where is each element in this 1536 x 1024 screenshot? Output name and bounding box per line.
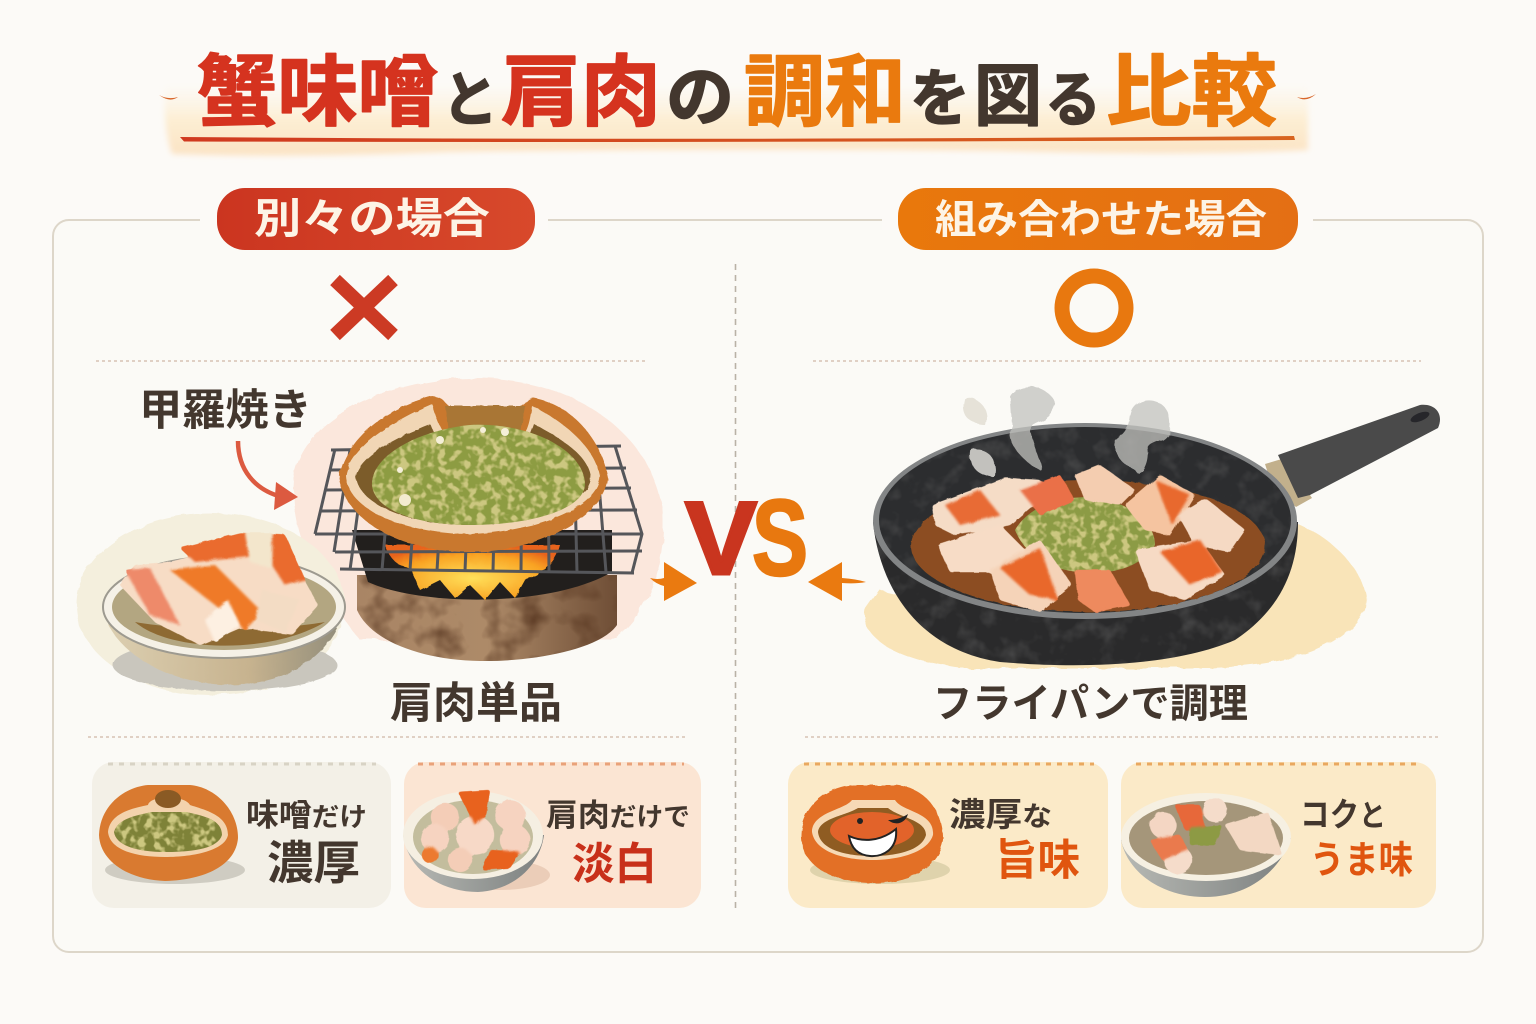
meat pieces (120, 533, 318, 645)
card: rich umami (788, 762, 1108, 908)
card: shoulder meat only: 淡白 (572, 840, 657, 889)
heading pill: combined: 組み合わせた場合 (935, 198, 1267, 242)
yellow wash (865, 520, 1366, 668)
wire grate (315, 446, 642, 573)
pink wash (294, 378, 664, 640)
steam (964, 386, 1171, 478)
title words: 比較 (1106, 48, 1277, 136)
VS badge: V (685, 481, 757, 597)
card: shoulder meat only (403, 762, 701, 908)
shadow (450, 860, 550, 890)
label: shoulder meat only: 肩肉単品 (390, 680, 562, 728)
text: コクと (1300, 796, 1386, 833)
arrow: left to VS (650, 562, 697, 601)
illustration: grilled crab shell on grate (294, 378, 664, 661)
text: 味噌だけ (246, 798, 367, 833)
ribbon curl left (159, 95, 178, 100)
crab shell (339, 396, 608, 552)
bowl (103, 606, 345, 685)
title words: る (1045, 67, 1101, 134)
meat (421, 790, 530, 872)
title words: 調和 (744, 48, 906, 136)
heading pill: separate (217, 188, 535, 250)
title (159, 48, 1316, 156)
title words: 蟹味噌 (197, 48, 438, 136)
comparison panel (53, 210, 1483, 952)
VS badge (685, 477, 808, 598)
icon: circle mark (1062, 276, 1126, 340)
card: body and umami: うま味 (1310, 840, 1413, 882)
label: cooked in frying pan: フライパンで調理 (933, 682, 1248, 726)
title words: 肩肉 (501, 48, 661, 136)
shadow (105, 856, 245, 884)
title words: の (666, 60, 734, 134)
mini crab shell (99, 785, 238, 881)
illustration: shoulder meat bowl (76, 513, 345, 695)
title words: 図 (974, 59, 1042, 135)
bowl shadow (113, 639, 337, 691)
text: 肩肉だけで (546, 798, 690, 833)
title underline (180, 136, 1295, 142)
crab miso center (1015, 497, 1155, 573)
crab miso mound (372, 425, 585, 525)
cream wash (76, 513, 344, 695)
card: body and umami (1121, 762, 1436, 908)
heading pill: combined (898, 188, 1298, 250)
arrow: to grilled shell (238, 441, 298, 510)
meat chunks (932, 465, 1245, 612)
flames (385, 545, 560, 600)
smiling crab (801, 785, 943, 883)
ribbon curl right (1297, 94, 1316, 99)
pan handle (1265, 405, 1440, 507)
label: grilled shell: 甲羅焼き (139, 387, 312, 435)
title words: と (442, 67, 498, 134)
shadow (810, 856, 950, 884)
card: miso only: 濃厚 (267, 837, 360, 889)
heading pill: separate: 別々の場合 (254, 195, 490, 242)
title words: を (910, 65, 970, 134)
illustration: frying pan (865, 386, 1440, 668)
title ribbon (165, 84, 1308, 156)
card: miso only (92, 762, 391, 908)
icon: cross mark (335, 280, 393, 335)
grey bowl (403, 835, 544, 892)
sauce (911, 480, 1265, 612)
title words (197, 48, 1277, 136)
bowl (1121, 838, 1291, 897)
pan body (873, 522, 1298, 665)
text: 濃厚 な (949, 796, 1052, 833)
meat (1150, 798, 1282, 874)
wink (888, 814, 908, 823)
VS badge: S (752, 477, 808, 598)
clay brazier (352, 530, 617, 661)
card: rich umami: 旨味 (995, 837, 1080, 885)
smile (849, 829, 896, 856)
arrow: right to VS (808, 562, 866, 601)
